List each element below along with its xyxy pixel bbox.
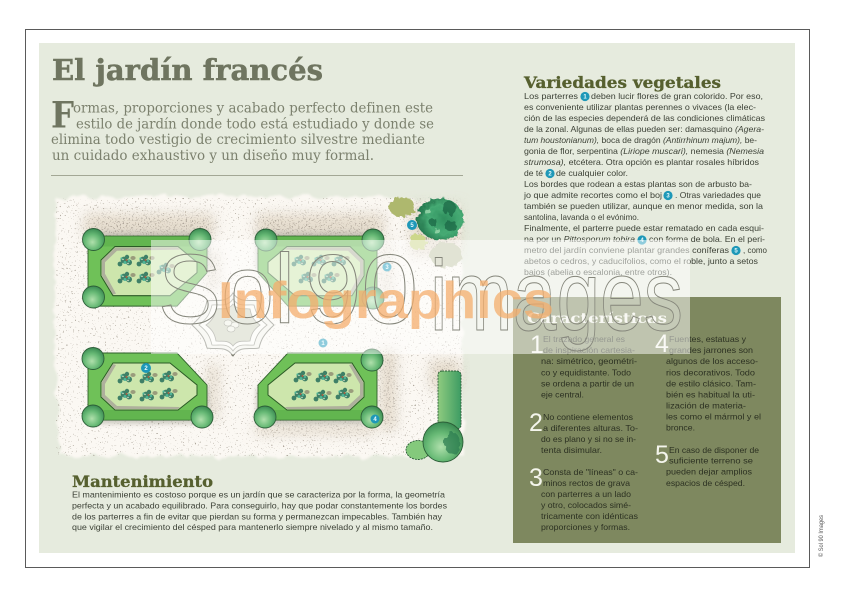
panel: características xyxy=(513,297,781,543)
watermark: Infographics xyxy=(218,272,554,330)
item 4: lización de materia- xyxy=(666,400,746,410)
text: variedades body: Los bordes que rodean a estas plantas son de arbusto ba- xyxy=(524,179,752,189)
text: mantenimiento body: que vigilar el crecimiento del césped para mantenerlo siempre nivelado y al mismo tamaño. xyxy=(72,522,433,532)
item 2: a diferentes alturas. To- xyxy=(543,423,638,433)
numbered markers on plan: 4 xyxy=(373,417,377,423)
inline number markers: 3 xyxy=(666,194,670,200)
item 4: algunos de los acceso- xyxy=(666,356,758,366)
item 2: 2 xyxy=(529,409,543,437)
title: El jardín francés xyxy=(52,53,323,87)
item 3: tricamente con idénticas xyxy=(541,511,638,521)
item 3 xyxy=(529,464,638,532)
item 1: na: simétrico, geométri- xyxy=(541,356,637,366)
numbered markers on plan: 1 xyxy=(321,341,325,347)
text: variedades body: tum houstonianum), boca de dragón (Antirrhinum majum), be- xyxy=(524,135,757,145)
intro text block: estilo de jardín donde todo está estudiado y donde se xyxy=(76,116,434,132)
intro text block xyxy=(51,94,434,164)
item 3: y otro, colocados simé- xyxy=(541,500,631,510)
text: variedades body: na por un Pittosporum tobira xyxy=(524,234,635,244)
item 4: 4 xyxy=(655,330,669,358)
text: variedades body: . Otras variedades que xyxy=(675,190,761,200)
text: variedades body: gonia de flor, serpentina (Liriope muscari), nemesia (Nemesia xyxy=(524,146,764,156)
text: variedades body: santolina, lavanda o el evónimo. xyxy=(524,212,639,222)
item 2 xyxy=(529,409,638,455)
parterre: bottom left xyxy=(88,353,209,424)
intro text block: un cuidado exhaustivo y un diseño muy formal. xyxy=(52,148,374,164)
item 5: suficiente terreno se xyxy=(669,456,753,466)
watermark: images xyxy=(430,240,683,352)
watermark xyxy=(151,234,690,354)
text: mantenimiento body: El mantenimiento es costoso porque es un jardín que se caracteriza por la forma, la geometría xyxy=(72,490,445,500)
inline number markers: 1 xyxy=(583,95,587,101)
text: variedades body: con forma de bola. En el peri- xyxy=(649,234,765,244)
text: mantenimiento body: perfecta y un acabado equilibrado. Para conseguirlo, hay que podar constantemente los bordes xyxy=(72,500,447,510)
text: variedades body: metro del jardín conviene plantar grandes coníferas xyxy=(524,245,729,255)
text: variedades body: , como xyxy=(743,245,767,255)
parterre: bottom right xyxy=(256,353,377,424)
text: variedades body: de cualquier color. xyxy=(556,168,628,178)
item 4: Fuentes, estatuas y xyxy=(669,334,747,344)
text: variedades body: strumosa), etcétera. Otra opción es plantar rosales híbridos xyxy=(524,157,759,167)
item 1: eje central. xyxy=(541,390,584,400)
item 3: minos rectos de grava xyxy=(543,478,630,488)
intro text block: F xyxy=(51,94,74,136)
text: mantenimiento body: de los parterres a fin de evitar que pierdan su forma y permanezcan impecables. También hay xyxy=(72,511,443,521)
item 3: con parterres a un lado xyxy=(541,489,631,499)
numbered markers on plan xyxy=(141,220,417,424)
inline number markers: 2 xyxy=(548,172,552,178)
text: variedades body xyxy=(523,91,767,277)
conifers and shrubs xyxy=(389,197,463,268)
item 4: de estilo clásico. Tam- xyxy=(666,378,756,388)
inline number markers: 5 xyxy=(734,249,738,255)
item 1: 1 xyxy=(530,331,544,359)
intro text block: elimina todo vestigio de crecimiento silvestre mediante xyxy=(51,132,425,148)
numbered markers on plan: 2 xyxy=(144,366,148,372)
gravel ground xyxy=(50,190,470,465)
item 3: 3 xyxy=(529,464,543,492)
text: variedades body: también se pueden utilizar, aunque en menor medida, son la xyxy=(524,201,763,211)
item 5: espacios de césped. xyxy=(666,478,745,488)
text: variedades body: ción de las especies dependerá de las condiciones climáticas xyxy=(524,113,765,123)
parterre: top left xyxy=(88,232,209,306)
text: variedades body: abetos o cedros, y caducifolios, como el roble, junto a setos xyxy=(524,256,758,266)
text: variedades body: Finalmente, el parterre puede estar rematado en cada esqui- xyxy=(524,223,764,233)
item 1: co y equidistante. Todo xyxy=(541,368,631,378)
heading: variedades vegetales: Variedades vegetales xyxy=(523,73,721,92)
item 3: Consta de "líneas" o ca- xyxy=(543,467,638,477)
text: variedades body: de té xyxy=(524,168,543,178)
item 5: En caso de disponer de xyxy=(669,445,759,455)
panel: mantenimiento xyxy=(72,472,447,532)
numbered markers on plan: 3 xyxy=(385,265,389,271)
item 4: les como el mármol y el xyxy=(666,412,761,422)
item 2: tenta disimular. xyxy=(541,445,602,455)
watermark: Sol xyxy=(158,234,295,344)
text: mantenimiento body xyxy=(72,490,447,532)
item 4 xyxy=(655,330,761,432)
panel background xyxy=(513,297,781,543)
item 5: pueden dejar amplios xyxy=(666,466,752,476)
item 5: 5 xyxy=(655,441,669,469)
item 2: No contiene elementos xyxy=(543,412,633,422)
hedge and bushes xyxy=(406,371,463,462)
parterre: top right xyxy=(256,232,377,306)
item 4: bronce. xyxy=(666,422,695,432)
item 4: grandes jarrones son xyxy=(669,345,753,355)
item 3: proporciones y formas. xyxy=(541,522,630,532)
text: variedades body: deben lucir flores de gran colorido. Por eso, xyxy=(591,91,763,101)
numbered markers on plan: 5 xyxy=(410,223,414,229)
item 1: de inspiración cartesia- xyxy=(543,345,635,355)
inline number markers xyxy=(545,92,741,255)
panel: background xyxy=(39,43,795,553)
central fountain xyxy=(192,293,274,356)
intro text block: ormas, proporciones y acabado perfecto definen este xyxy=(73,101,433,117)
text: variedades body: jo que admite recortes como el boj xyxy=(523,190,662,200)
item 4: bién es habitual la uti- xyxy=(666,390,755,400)
text: variedades body: bajos (abelia o escalonia, entre otros). xyxy=(524,267,672,277)
item 5 xyxy=(655,441,759,488)
watermark: 90 xyxy=(305,234,418,344)
topiary balls xyxy=(82,228,384,428)
item 2: do es plano y si no se in- xyxy=(541,434,636,444)
item 1 xyxy=(530,331,637,400)
panel: variedades vegetales xyxy=(523,73,767,277)
heading: características: Características xyxy=(527,311,667,327)
text: variedades body: Los parterres xyxy=(524,91,578,101)
copyright credit: © Sol 90 Images xyxy=(817,514,825,557)
item 4: rios decorativos. Todo xyxy=(666,368,755,378)
heading: mantenimiento: Mantenimiento xyxy=(72,472,213,491)
garden plan illustration xyxy=(50,190,470,465)
inline number markers: 4 xyxy=(640,238,644,244)
text: variedades body: es conveniente utilizar plantas perennes o vivaces (la elec- xyxy=(524,102,756,112)
item 1: El trazado general es xyxy=(543,334,625,344)
item 1: se ordena a partir de un xyxy=(541,378,634,388)
text: variedades body: de la zonal. Algunas de ellas pueden ser: damasquino (Agera- xyxy=(524,124,764,134)
